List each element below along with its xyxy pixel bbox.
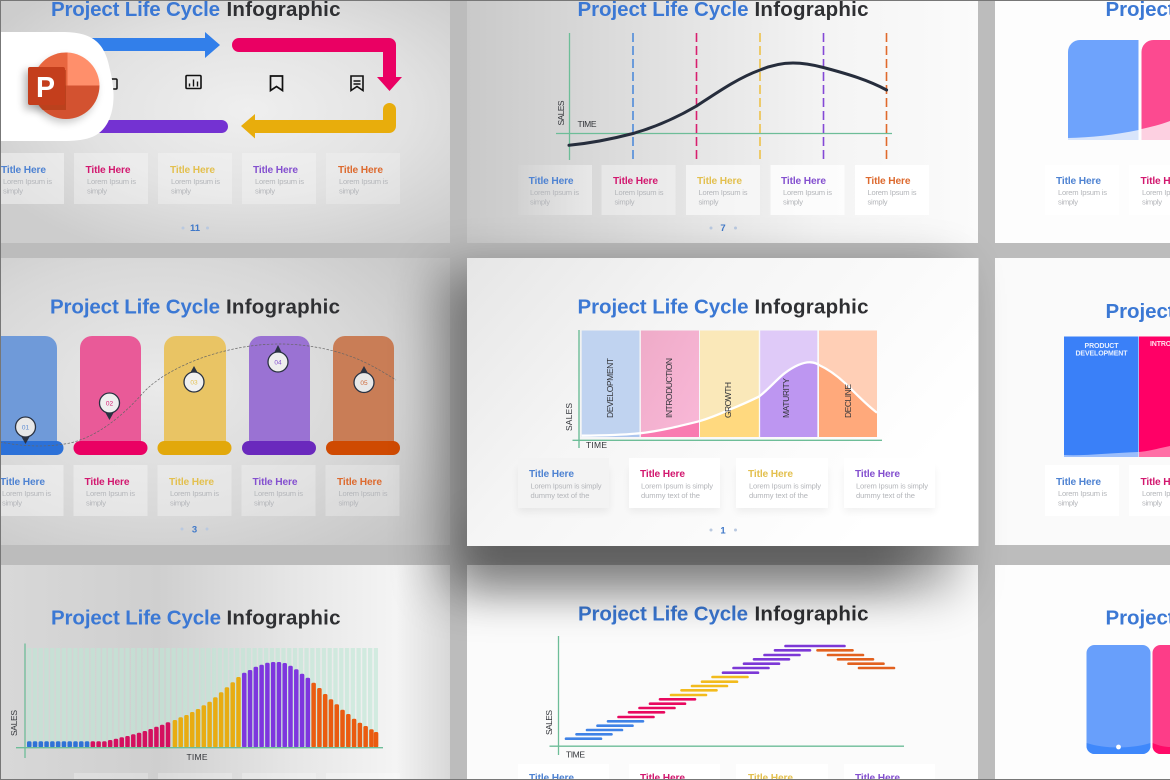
card: 3: dummy text of the: [749, 491, 808, 500]
PowerPoint badge: [0, 32, 114, 141]
card: 1: [518, 458, 609, 512]
column: pink: [1142, 40, 1170, 140]
column: 5: [326, 336, 400, 455]
title: Infographic: [226, 296, 340, 318]
page number: 1: [720, 526, 726, 536]
card: 5: [855, 165, 929, 215]
title: [51, 0, 340, 21]
card: 2: Title Here: [613, 176, 658, 187]
card: 4: Title Here: [252, 477, 298, 488]
card: 4: Lorem Ipsum is: [255, 177, 304, 186]
card: 2: [1129, 465, 1170, 516]
column: blue: [1068, 40, 1138, 140]
card: 1: [518, 165, 592, 215]
card: 2: dummy text of the: [641, 491, 700, 500]
card: 5: Title Here: [337, 477, 382, 488]
chart: life-cycle stages: TIME: [586, 440, 607, 450]
card: 3: Lorem Ipsum is: [171, 177, 220, 186]
title: [50, 296, 340, 318]
card: 2: simply: [1142, 198, 1162, 206]
chart: sales curve: [556, 33, 892, 160]
title: [578, 296, 868, 318]
shadow of centre slide: [440, 270, 955, 590]
card: 5: [326, 465, 400, 516]
card: 3: [158, 153, 232, 204]
chart: life-cycle stages: MATURITY: [781, 378, 791, 418]
panel: bottom-right slide, cropped: [995, 565, 1170, 779]
card: 4: dummy text of the: [856, 491, 915, 500]
phone: blue: [1086, 645, 1150, 754]
page number: 3: [192, 524, 197, 536]
column: product development: [1064, 336, 1138, 457]
title: Project Life Cycle: [578, 296, 748, 318]
pin: 05: [354, 366, 374, 392]
card: 3: Lorem Ipsum is: [170, 489, 219, 498]
card: 1: dummy text of the: [530, 491, 590, 500]
card: 1: [0, 153, 64, 204]
card: 4: simply: [783, 198, 803, 206]
card: 4: Lorem Ipsum is: [783, 188, 832, 197]
card: 4: Title Here: [253, 165, 298, 176]
card: 4: simply: [254, 498, 274, 508]
card: 3: Title Here: [170, 165, 215, 176]
title: Infographic: [754, 296, 868, 318]
card: 2: [602, 165, 676, 215]
chart: life-cycle stages: GROWTH: [723, 382, 733, 418]
card: 2: [74, 465, 148, 516]
card: 3: Title Here: [169, 477, 214, 488]
arrow: yellow: [241, 103, 396, 138]
chart: life-cycle stages: DECLINE: [843, 384, 853, 418]
card: 3: Title Here: [697, 176, 742, 187]
card: 2: simply: [87, 186, 107, 196]
card: 1: Title Here: [1, 165, 46, 176]
chart: sales curve: TIME: [578, 119, 597, 129]
arrow: blue: [90, 32, 220, 58]
phone: pink: [1152, 645, 1170, 754]
card: 5: Lorem Ipsum is: [338, 489, 388, 498]
column: 1: [0, 336, 64, 455]
card: 4: [242, 465, 316, 516]
card: 3: [686, 165, 760, 215]
card: 1: Lorem Ipsum is: [2, 489, 51, 498]
card: 2: Lorem Ipsum is: [87, 177, 136, 186]
card: 4: Lorem Ipsum is simply: [856, 482, 928, 490]
card: 2: Lorem Ipsum is: [614, 188, 664, 197]
panel: top-right slide, cropped: [995, 0, 1170, 243]
card: 1: [1045, 465, 1119, 516]
pin: 01: [16, 417, 36, 444]
icon: bar chart: [186, 76, 201, 88]
pin: 01: 01: [22, 424, 29, 432]
card: 5: simply: [339, 186, 359, 196]
arrow: pink: [232, 38, 402, 91]
card: 4: simply: [255, 186, 275, 196]
column: product development: PRODUCT: [1084, 343, 1119, 350]
column: 4: [242, 336, 316, 455]
panel: top-left slide, arrow process: [0, 0, 450, 243]
title: Infographic: [754, 602, 868, 626]
card: 3: Title Here: [748, 469, 793, 480]
card: 2: [629, 458, 720, 512]
card: 1: simply: [3, 186, 23, 196]
card: 2: Title Here: [640, 469, 685, 480]
card: 1: Lorem Ipsum is: [1058, 489, 1107, 498]
card: 4: [844, 458, 935, 512]
page number: [710, 526, 737, 536]
card: 2: Lorem Ipsum is: [86, 489, 135, 498]
page number: [710, 223, 737, 234]
icon: bookmark: [270, 76, 282, 90]
card: 3: simply: [170, 498, 190, 508]
chart: bar chart: [9, 644, 383, 762]
card: 5: Title Here: [338, 165, 383, 176]
title: [578, 602, 868, 626]
pin: 04: 04: [274, 360, 282, 366]
arrow: purple: [90, 120, 228, 133]
title: Project Life Cycle: [51, 606, 221, 630]
panel: bottom-left slide, bar chart: [1, 565, 450, 780]
chart: stepped bars: SALES: [544, 710, 554, 735]
card: 5: [326, 153, 400, 204]
card: 4: [770, 165, 844, 215]
pin: 05: 05: [360, 380, 368, 387]
pin: 02: [100, 393, 120, 420]
card: 1: [0, 465, 64, 516]
chart: life-cycle stages: [564, 330, 882, 450]
chart: stepped bars: [544, 636, 904, 760]
card: 3: simply: [171, 186, 191, 196]
column: product development: DEVELOPMENT: [1076, 350, 1128, 358]
card: 1: [1045, 165, 1119, 215]
card: 1: Title Here: [529, 176, 574, 187]
card: 2: Title Here: [86, 165, 131, 176]
title: Project Life Cycle: [50, 296, 220, 318]
card: 2: simply: [614, 198, 635, 206]
card: 5: Lorem Ipsum is: [868, 188, 917, 197]
chart: bar chart: SALES: [9, 710, 19, 736]
card: 5: Lorem Ipsum is: [339, 177, 388, 186]
card: 2: Lorem Ipsum is simply: [641, 482, 713, 490]
pin: 03: [184, 366, 204, 392]
card: 1: Title Here: [0, 477, 45, 488]
card: 1: Title Here: [1056, 176, 1101, 187]
card: 2: [1129, 165, 1170, 215]
page number: 11: [190, 223, 201, 234]
card: 4: Title Here: [855, 469, 900, 480]
card: 3: simply: [698, 198, 719, 206]
chart: life-cycle stages: DEVELOPMENT: [605, 358, 615, 418]
page number: [180, 524, 208, 536]
page number: [182, 223, 209, 234]
panel: middle-left slide, columns with pins: [0, 258, 450, 545]
card: 5: simply: [868, 198, 888, 206]
card: 5: simply: [338, 498, 359, 508]
card: 3: Lorem Ipsum is: [698, 188, 748, 197]
card: 4: Lorem Ipsum is: [254, 489, 303, 498]
card: 2: Title Here: [84, 477, 130, 488]
title: Project Life Cycle: [578, 602, 748, 626]
dashed life-cycle curve: [0, 344, 396, 446]
card: 1: simply: [1058, 198, 1078, 206]
card: 1: Title Here: [529, 469, 574, 480]
title: Infographic: [226, 606, 340, 630]
panel: centre slide, stage chart: [467, 258, 978, 546]
card: 1: simply: [530, 198, 550, 206]
card: 4: Title Here: [781, 176, 826, 187]
card: 2: [74, 153, 148, 204]
card: 1: Lorem Ipsum is: [3, 177, 52, 186]
pin: 02: 02: [106, 400, 113, 408]
title: [578, 0, 868, 21]
chart: life-cycle stages: SALES: [564, 403, 574, 431]
card: 3: [736, 458, 828, 512]
card tops, cropped: [518, 764, 935, 780]
card: 5: Title Here: [866, 176, 911, 187]
card: 3: [158, 465, 232, 516]
card: 3: Lorem Ipsum is simply: [749, 482, 821, 490]
chart: stepped bars: TIME: [566, 750, 585, 760]
card: 2: simply: [86, 498, 106, 508]
card: 1: Title Here: [1056, 477, 1101, 488]
icon: PowerPoint logo: P: [36, 72, 55, 104]
card: 1: simply: [2, 498, 22, 508]
card: 1: simply: [1058, 498, 1078, 508]
pin: 03: 03: [190, 380, 198, 386]
card: 2: simply: [1142, 498, 1162, 508]
icon: partially hidden document: [110, 79, 117, 89]
column: 2: [74, 336, 148, 455]
chart: bar chart: TIME: [186, 752, 208, 762]
column: 3: [158, 336, 232, 455]
panel: middle-right slide, cropped: [995, 258, 1170, 545]
card: 4: [242, 153, 316, 204]
icon: bookmark with lines: [351, 76, 363, 90]
column: introduction: [1139, 336, 1170, 457]
panel: bottom-middle slide, stepped bars: [467, 565, 978, 780]
card: 1: Lorem Ipsum is simply: [530, 482, 602, 490]
chart: life-cycle stages: INTRODUCTION: [664, 358, 674, 418]
card: 1: Lorem Ipsum is: [1058, 188, 1107, 197]
chart: sales curve: SALES: [556, 100, 566, 126]
card: 1: Lorem Ipsum is: [530, 188, 579, 197]
panel: top-middle slide, sales curve: [467, 0, 978, 243]
page number: 7: [720, 223, 726, 234]
pin: 04: [268, 345, 288, 372]
card tops, cropped: [74, 773, 400, 780]
title: [51, 606, 340, 630]
